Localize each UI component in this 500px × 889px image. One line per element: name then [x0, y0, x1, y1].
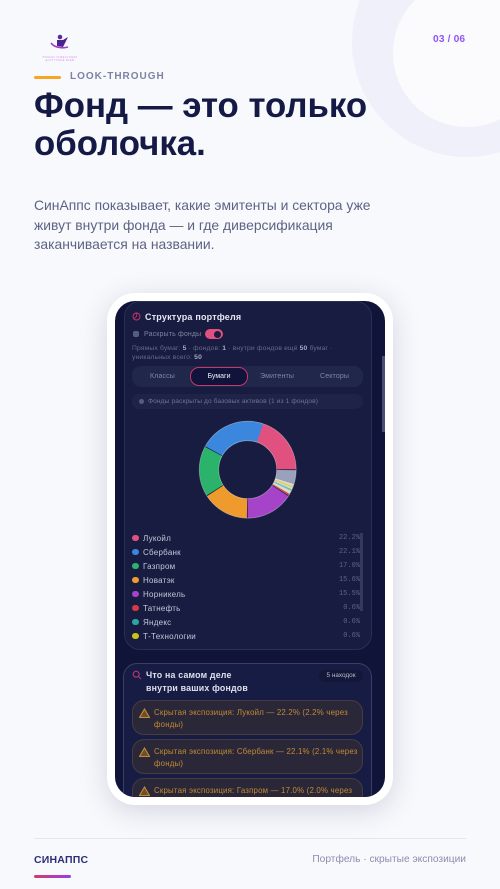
tab: issuers: Эмитенты: [260, 373, 294, 380]
page number: 03 / 06: [433, 34, 465, 45]
warning 2: Скрытая экспозиция: Сбербанк — 22.1% (2.1% через: [154, 747, 358, 756]
description: заканчивается на названии.: [34, 236, 214, 252]
tab: securities active: [190, 367, 248, 386]
legend: Лукойл: [143, 534, 171, 542]
tab: classes: Классы: [150, 373, 175, 380]
logo: ДОСТУПНЫЕ ВСЕМ: [46, 58, 74, 62]
logo: ФИНАНС ИНВЕСТИЦИИ: [42, 55, 78, 59]
legend: 15.5%: [339, 590, 360, 598]
toggle: [205, 329, 223, 339]
stats text: уникальных всего: 50: [132, 354, 202, 361]
warning 1: Скрытая экспозиция: Лукойл — 22.2% (2.2% через: [154, 708, 348, 717]
legend: Норникель: [143, 590, 185, 598]
title: Фонд — это только: [34, 86, 367, 125]
legend: Яндекс: [143, 618, 171, 626]
title: [34, 86, 367, 163]
legend: Т-Технологии: [143, 632, 196, 640]
shield icon: [133, 331, 139, 337]
legend: 22.2%: [339, 534, 360, 542]
legend: 17.0%: [339, 562, 360, 570]
legend: Газпром: [143, 562, 175, 570]
legend: Татнефть: [143, 604, 181, 612]
legend: 15.6%: [339, 576, 360, 584]
stats text: [132, 345, 333, 361]
legend: 0.6%: [343, 618, 360, 626]
findings heading: Что на самом деле: [146, 670, 232, 680]
phone screen: [115, 301, 385, 797]
donut chart: [198, 420, 297, 519]
description: СинАппс показывает, какие эмитенты и сектора уже: [34, 197, 370, 213]
warning 3 clipped: [132, 778, 363, 797]
eyebrow: LOOK-THROUGH: [70, 71, 165, 82]
legend scrollbar: [360, 533, 363, 611]
footer caption: Портфель · скрытые экспозиции: [312, 854, 466, 865]
findings heading: [146, 670, 248, 693]
warning 1: фонды): [154, 720, 183, 729]
background ring decoration: [352, 0, 500, 157]
stats text: Прямых бумаг: 5 · фондов: 1 · внутри фондов ещё 50 бумаг ·: [132, 345, 333, 352]
eyebrow accent line: [34, 76, 61, 79]
title: оболочка.: [34, 124, 206, 163]
panel: hidden exposures: [123, 663, 372, 797]
scrollbar: [382, 356, 385, 432]
tabs bar: [132, 366, 363, 387]
description: [34, 197, 370, 252]
warning 1: [132, 700, 363, 735]
legend: Новатэк: [143, 576, 175, 584]
warning 2: [132, 739, 363, 774]
legend: 22.1%: [339, 548, 360, 556]
findings heading: внутри ваших фондов: [146, 682, 248, 692]
warning 3 clipped: Скрытая экспозиция: Газпром — 17.0% (2.0% через: [154, 786, 352, 795]
logo: [42, 34, 78, 62]
panel: portfolio structure: [124, 301, 372, 650]
notice bar: [132, 394, 363, 409]
footer accent line: [34, 875, 71, 878]
toggle label: Раскрыть фонды: [144, 331, 201, 338]
panel heading: Структура портфеля: [145, 312, 241, 322]
notice icon: [139, 399, 144, 404]
legend: 0.6%: [343, 632, 360, 640]
phone mockup: [107, 293, 393, 805]
legend: 0.6%: [343, 604, 360, 612]
footer divider: [34, 838, 466, 839]
notice text: Фонды раскрыты до базовых активов (1 из 1 фондов): [148, 398, 318, 405]
findings badge: 5 находок: [326, 672, 356, 679]
tab: securities active: Бумаги: [207, 373, 231, 380]
findings badge: [319, 670, 363, 682]
panel icon: [132, 312, 140, 320]
tab: sectors: Секторы: [320, 373, 349, 380]
warning 2: фонды): [154, 759, 183, 768]
footer brand: СИНАППС: [34, 854, 88, 866]
description: живут внутри фонда — и где диверсификация: [34, 217, 333, 233]
search icon: [132, 670, 142, 680]
legend: Сбербанк: [143, 548, 181, 556]
